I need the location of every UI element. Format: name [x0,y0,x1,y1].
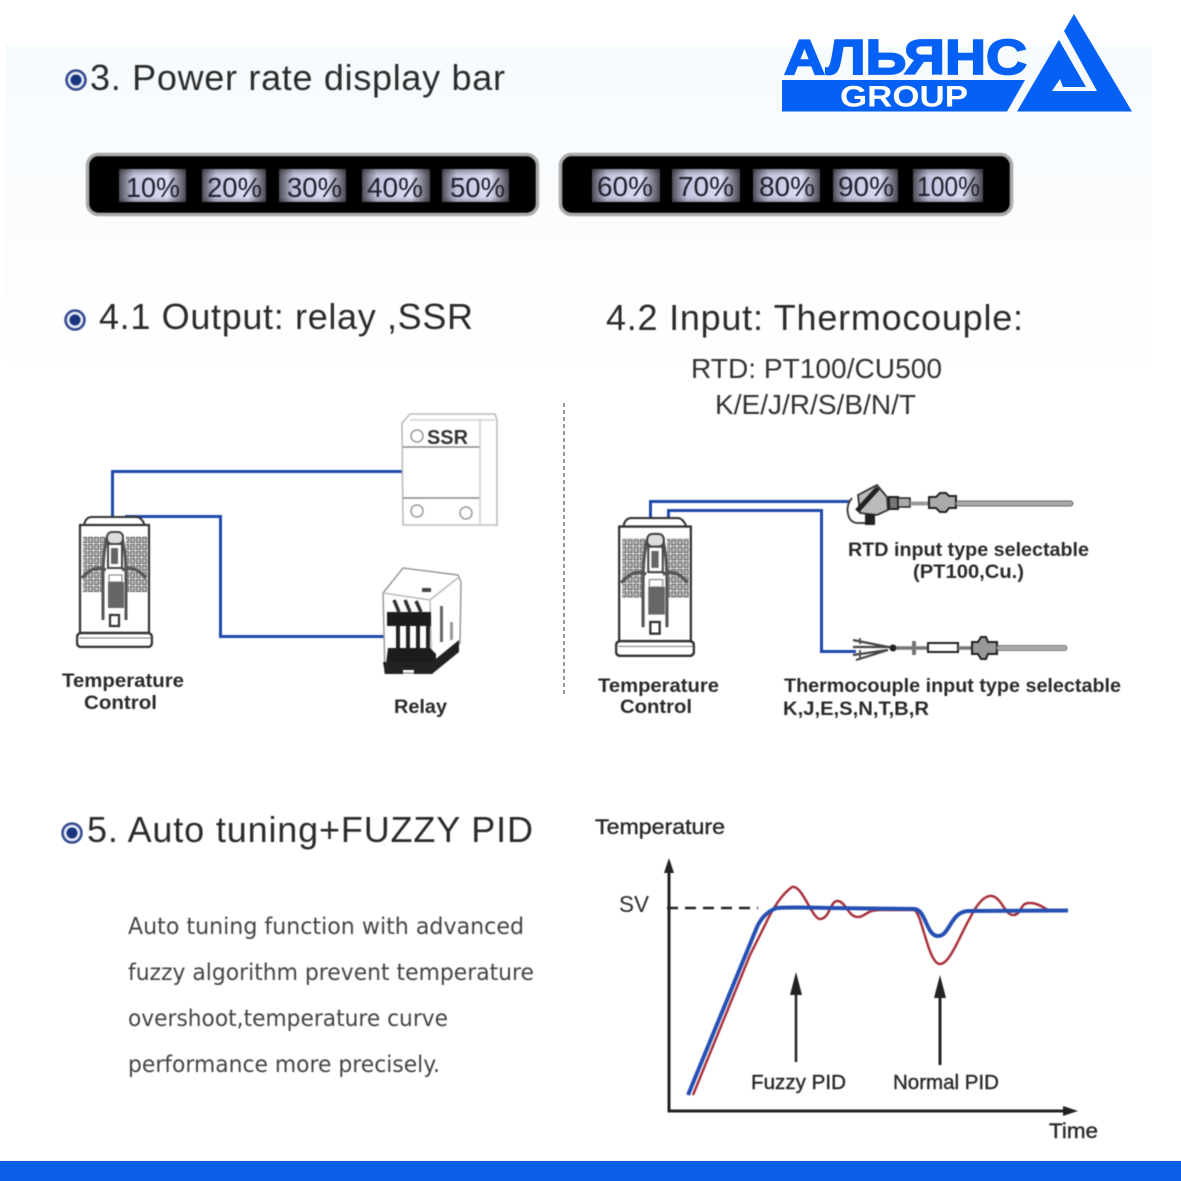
icon: relay [383,568,461,674]
label: thermocouple [783,675,1121,720]
label: temperature control [598,675,719,718]
curve: fuzzy PID [688,908,1068,1095]
panel: power bar 60 to 100 percent [560,154,1012,214]
text: description: Auto tuning function with advanced [128,912,524,940]
wires to sensors [650,502,856,652]
curve: normal PID [693,887,1048,1095]
footer bar [0,1161,1181,1181]
arrow: normal PID [934,975,946,1065]
panel: power bar 10 to 50 percent: 50% [450,172,505,203]
panel: power bar 60 to 100 percent: 60% [597,171,653,202]
text: description: performance more precisely. [128,1050,440,1078]
label: relay: Relay [394,696,447,718]
chart: temperature response: Temperature [595,816,725,839]
panel: power bar 10 to 50 percent [88,154,538,214]
chart: temperature response: SV [619,891,650,917]
logo [782,14,1132,114]
panel: power bar 10 to 50 percent: 10% [126,172,180,203]
panel: power bar 60 to 100 percent: 70% [678,171,734,202]
panel: power bar 60 to 100 percent: 80% [759,171,815,202]
panel: power bar 60 to 100 percent: 100% [917,171,980,202]
heading: input thermocouple: 4.2 Input: Thermocouple: [606,297,1023,338]
text: input types [691,353,942,420]
arrow: fuzzy PID [790,972,802,1062]
text: input types: K/E/J/R/S/B/N/T [715,389,916,420]
label: temperature control: Control [84,692,157,714]
diagram: input wiring [598,485,1121,720]
panel: power bar 10 to 50 percent: 20% [207,172,262,203]
label: temperature control: Control [620,696,692,718]
heading: power rate display bar: 3. Power rate display bar [90,57,505,98]
icon: SSR module: SSR [427,427,469,449]
panel: power bar 60 to 100 percent: 90% [838,171,894,202]
label: RTD: RTD input type selectable [848,539,1089,561]
icon: thermocouple probe [853,637,1067,660]
label: temperature control: Temperature [62,670,184,692]
text: description [128,912,534,1078]
panel: power bar 10 to 50 percent: 40% [367,172,423,203]
text: description: overshoot,temperature curve [128,1004,448,1032]
label: temperature control [62,670,184,714]
icon: bullet [66,70,86,90]
icon: temperature controller [616,518,694,656]
text: description: fuzzy algorithm prevent temperature [128,958,534,986]
label: temperature control: Temperature [598,675,719,697]
label: thermocouple: K,J,E,S,N,T,B,R [783,698,929,720]
label: RTD [848,539,1089,583]
icon: bullet [62,824,82,842]
label: thermocouple: Thermocouple input type selectable [784,675,1121,697]
text: input types: RTD: PT100/CU500 [691,353,942,384]
logo: GROUP [840,80,968,114]
icon: bullet [66,310,84,330]
wires to SSR and relay [112,472,403,636]
axes [664,858,1078,1116]
icon: RTD probe [848,485,1073,525]
icon: SSR module [402,414,497,525]
background panel [5,45,1152,385]
panel: power bar 10 to 50 percent: 30% [287,172,342,203]
diagram: output wiring [62,414,497,718]
heading: output relay SSR: 4.1 Output: relay ,SSR [99,296,473,337]
chart: temperature response: Fuzzy PID [751,1072,846,1094]
label: RTD: (PT100,Cu.) [913,561,1024,583]
heading: auto tuning fuzzy PID: 5. Auto tuning+FUZZY PID [87,809,533,850]
logo: АЛЬЯНС [784,31,1027,85]
icon: temperature controller [77,517,152,647]
chart: temperature response: Time [1049,1120,1098,1143]
chart: temperature response [595,816,1098,1143]
chart: temperature response: Normal PID [893,1072,999,1094]
